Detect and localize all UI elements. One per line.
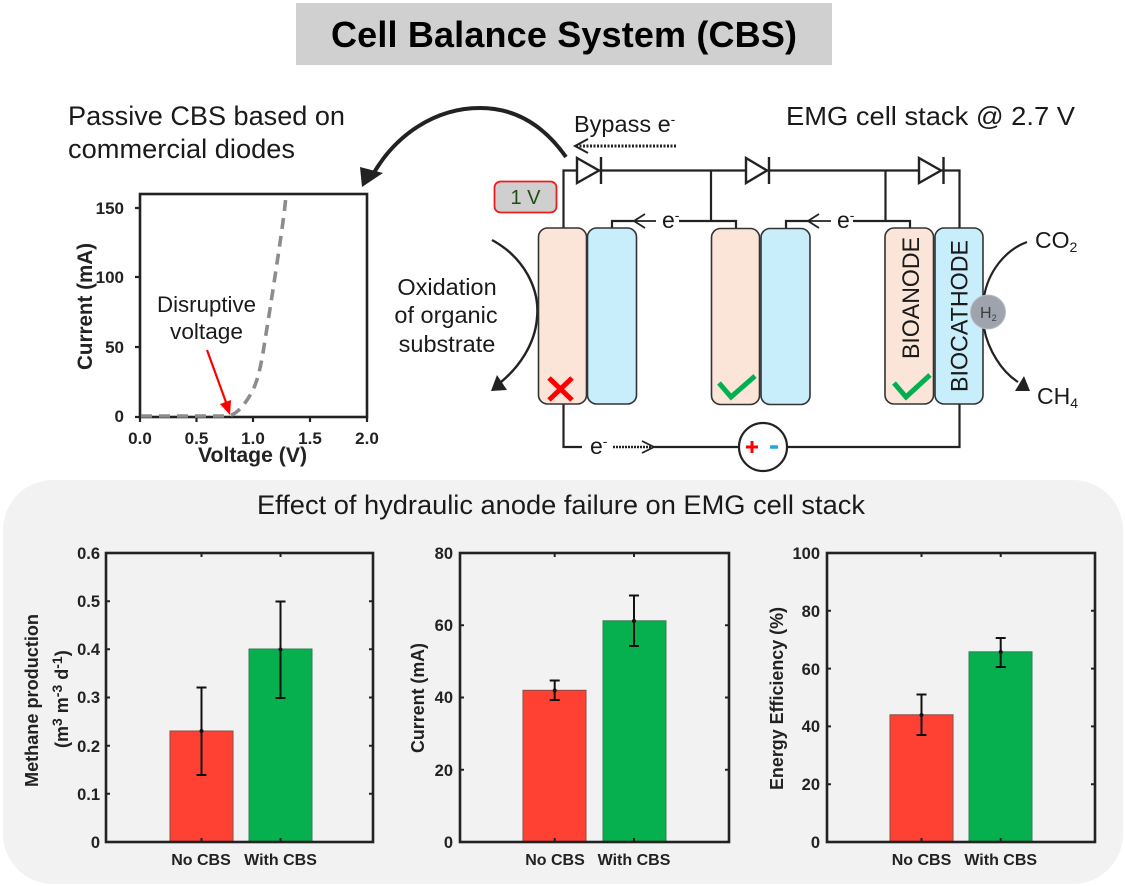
icon: green check xyxy=(719,376,755,397)
bioanode label: BIOANODE xyxy=(898,237,925,359)
chart: methane production: -3 xyxy=(49,685,65,697)
title banner xyxy=(296,3,832,65)
chart: methane production: 0.5 xyxy=(77,593,100,611)
electron flow arrow middle right: e xyxy=(837,207,850,233)
x axis title: Voltage (V) xyxy=(198,444,307,467)
chart: methane production: ) xyxy=(52,650,72,656)
cell 2 xyxy=(712,228,810,404)
chart: methane production: 0.3 xyxy=(77,689,100,707)
chart: current: 40 xyxy=(435,689,453,707)
y axis labels xyxy=(96,199,124,426)
chart: current: 0 xyxy=(444,834,453,852)
chart: methane production: No CBS xyxy=(171,852,231,869)
cell 1 xyxy=(538,228,636,404)
diode 1 xyxy=(577,157,601,184)
chart: energy efficiency: 40 xyxy=(802,718,820,736)
chart: methane production: With CBS xyxy=(244,852,317,869)
annotation: voltage: voltage xyxy=(170,319,243,344)
icon: green check xyxy=(894,375,930,397)
x axis labels xyxy=(128,429,379,448)
chart: methane production: Methane production xyxy=(22,614,42,787)
label: oxidation of organic substrate: of organic xyxy=(394,302,498,328)
chart: methane production: 0 xyxy=(91,834,100,852)
electron flow arrow bottom xyxy=(590,433,654,459)
chart: current: No CBS xyxy=(525,852,585,869)
chart: methane production xyxy=(22,545,373,869)
badge: 1 V: 1 V xyxy=(510,187,541,209)
label: CO2: CO xyxy=(1035,227,1070,253)
diode 2 xyxy=(746,157,769,184)
cell 3 with labels xyxy=(885,228,983,404)
power supply xyxy=(739,423,787,471)
chart: methane production: d xyxy=(52,669,72,685)
y axis title: Current (mA) xyxy=(74,243,97,370)
chart: current: 60 xyxy=(435,617,453,635)
chart: methane production: 0.6 xyxy=(77,545,100,563)
x axis labels: 1.0 xyxy=(241,429,265,448)
chart: current: With CBS xyxy=(598,852,671,869)
electron flow arrow middle left: e xyxy=(662,207,675,233)
biocathode label: BIOCATHODE xyxy=(946,240,974,392)
arrow: bypass electrons xyxy=(575,139,676,153)
x axis labels: 1.5 xyxy=(298,429,322,448)
chart: methane production: -1 xyxy=(49,656,65,669)
chart: methane production: 0.4 xyxy=(77,641,101,659)
electron flow arrow bottom: e xyxy=(590,433,603,459)
chart: energy efficiency xyxy=(767,545,1095,869)
annotation: disruptive voltage: Disruptive xyxy=(157,292,256,317)
chart: energy efficiency: Energy Efficiency (%) xyxy=(767,607,787,790)
x axis labels: 0.5 xyxy=(185,429,208,448)
electron flow arrow middle left xyxy=(634,207,680,233)
y axis labels: 0 xyxy=(115,407,124,426)
arrow: from diode to diode curve xyxy=(360,108,566,187)
chart: current: 20 xyxy=(435,762,453,780)
y axis labels: 100 xyxy=(96,268,124,287)
chart: current: 80 xyxy=(435,545,453,563)
diode 3 xyxy=(919,157,944,184)
chart: current: Current (mA) xyxy=(408,643,428,753)
panel heading: Effect of hydraulic anode failure on EMG cell stack xyxy=(257,490,865,520)
heading: EMG cell stack: EMG cell stack @ 2.7 V xyxy=(786,101,1076,131)
chart: current xyxy=(408,545,729,869)
electron flow arrow middle left: - xyxy=(675,207,680,223)
chart: diode current-voltage curve xyxy=(74,194,379,467)
arrow: CO2 to H2 xyxy=(984,242,1027,297)
label: oxidation of organic substrate: Oxidation xyxy=(397,274,497,300)
circuit wiring xyxy=(564,170,960,447)
badge: 1 V xyxy=(494,182,556,212)
electron flow arrow bottom: - xyxy=(603,433,608,449)
heading: passive CBS: commercial diodes xyxy=(68,134,295,164)
label: oxidation of organic substrate: substrate xyxy=(399,331,495,357)
chart: energy efficiency: With CBS xyxy=(964,852,1037,869)
y axis labels: 50 xyxy=(105,338,124,357)
label: CO2: 2 xyxy=(1070,239,1078,255)
chart: energy efficiency: No CBS xyxy=(892,852,952,869)
heading: passive CBS: Passive CBS based on xyxy=(68,101,345,131)
icon: H2 bubble xyxy=(970,295,1006,329)
arrow: oxidation curve xyxy=(491,240,537,391)
x axis labels: 0.0 xyxy=(128,429,152,448)
diode curve line xyxy=(141,195,286,416)
panel: effect of hydraulic anode failure xyxy=(3,480,1123,884)
icon: H2 bubble: 2 xyxy=(992,313,997,323)
bypass electron label: - xyxy=(671,111,676,127)
chart: energy efficiency: 20 xyxy=(802,776,820,794)
chart: methane production: 0.1 xyxy=(77,786,100,804)
chart: energy efficiency: 80 xyxy=(802,603,820,621)
icon: red cross xyxy=(549,378,572,400)
bypass electron label: Bypass e xyxy=(574,111,671,137)
label: CH4: 4 xyxy=(1070,395,1078,411)
chart: methane production: 0.2 xyxy=(77,738,100,756)
title banner: Cell Balance System (CBS) xyxy=(331,14,797,55)
arrow: red disruptive voltage pointer xyxy=(207,350,231,415)
chart: energy efficiency: 0 xyxy=(811,834,820,852)
chart: energy efficiency: 100 xyxy=(792,545,820,563)
chart: methane production: 3 xyxy=(49,718,65,726)
electron flow arrow middle right: - xyxy=(850,207,855,223)
y axis labels: 150 xyxy=(96,199,124,218)
chart: energy efficiency: 60 xyxy=(802,661,820,679)
chart: methane production: (m xyxy=(52,726,72,748)
label: CH4: CH xyxy=(1037,383,1070,409)
chart: methane production: m xyxy=(52,697,72,718)
electron flow arrow middle right xyxy=(808,207,855,233)
icon: H2 bubble: H xyxy=(980,305,992,322)
arrow: H2 to CH4 xyxy=(984,328,1030,391)
x axis labels: 2.0 xyxy=(355,429,379,448)
